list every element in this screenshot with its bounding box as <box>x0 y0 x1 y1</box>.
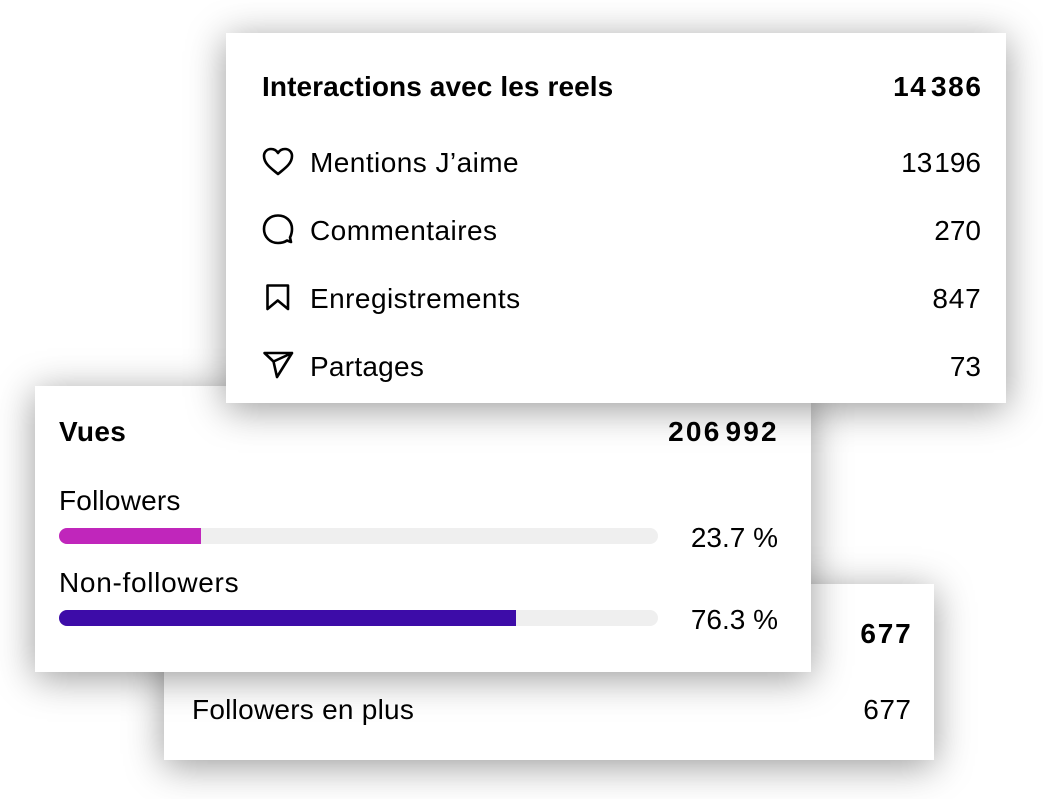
value: followers percent: 23.7 % <box>691 522 778 553</box>
value: followers en plus: 677 <box>863 694 912 725</box>
total interactions: 14386 <box>893 71 982 102</box>
icon: heart <box>262 148 294 176</box>
panel: reel interactions <box>226 33 1006 403</box>
heading: interactions: Interactions avec les reels <box>262 71 613 102</box>
label: saves: Enregistrements <box>310 283 521 314</box>
heading: vues: Vues <box>59 416 126 447</box>
value: comments: 270 <box>934 215 981 246</box>
panel: followers gained <box>164 584 934 760</box>
value: saves: 847 <box>932 283 982 314</box>
label: followers: Followers <box>59 485 181 516</box>
label: followers en plus: Followers en plus <box>192 694 414 725</box>
icon: bookmark <box>266 284 290 310</box>
value: non-followers percent: 76.3 % <box>691 604 778 635</box>
value: shares: 73 <box>950 351 981 382</box>
icon: share <box>263 352 294 378</box>
label: comments: Commentaires <box>310 215 497 246</box>
panel: views <box>35 386 811 672</box>
total followers gained: 677 <box>860 618 912 649</box>
label: shares: Partages <box>310 351 424 382</box>
total views: 206992 <box>668 416 779 447</box>
label: non-followers: Non-followers <box>59 567 239 598</box>
value: likes: 13196 <box>901 147 981 178</box>
label: likes: Mentions J’aime <box>310 147 519 178</box>
bar: non-followers <box>59 610 658 626</box>
bar: followers <box>59 528 658 544</box>
icon: comment <box>262 214 294 244</box>
